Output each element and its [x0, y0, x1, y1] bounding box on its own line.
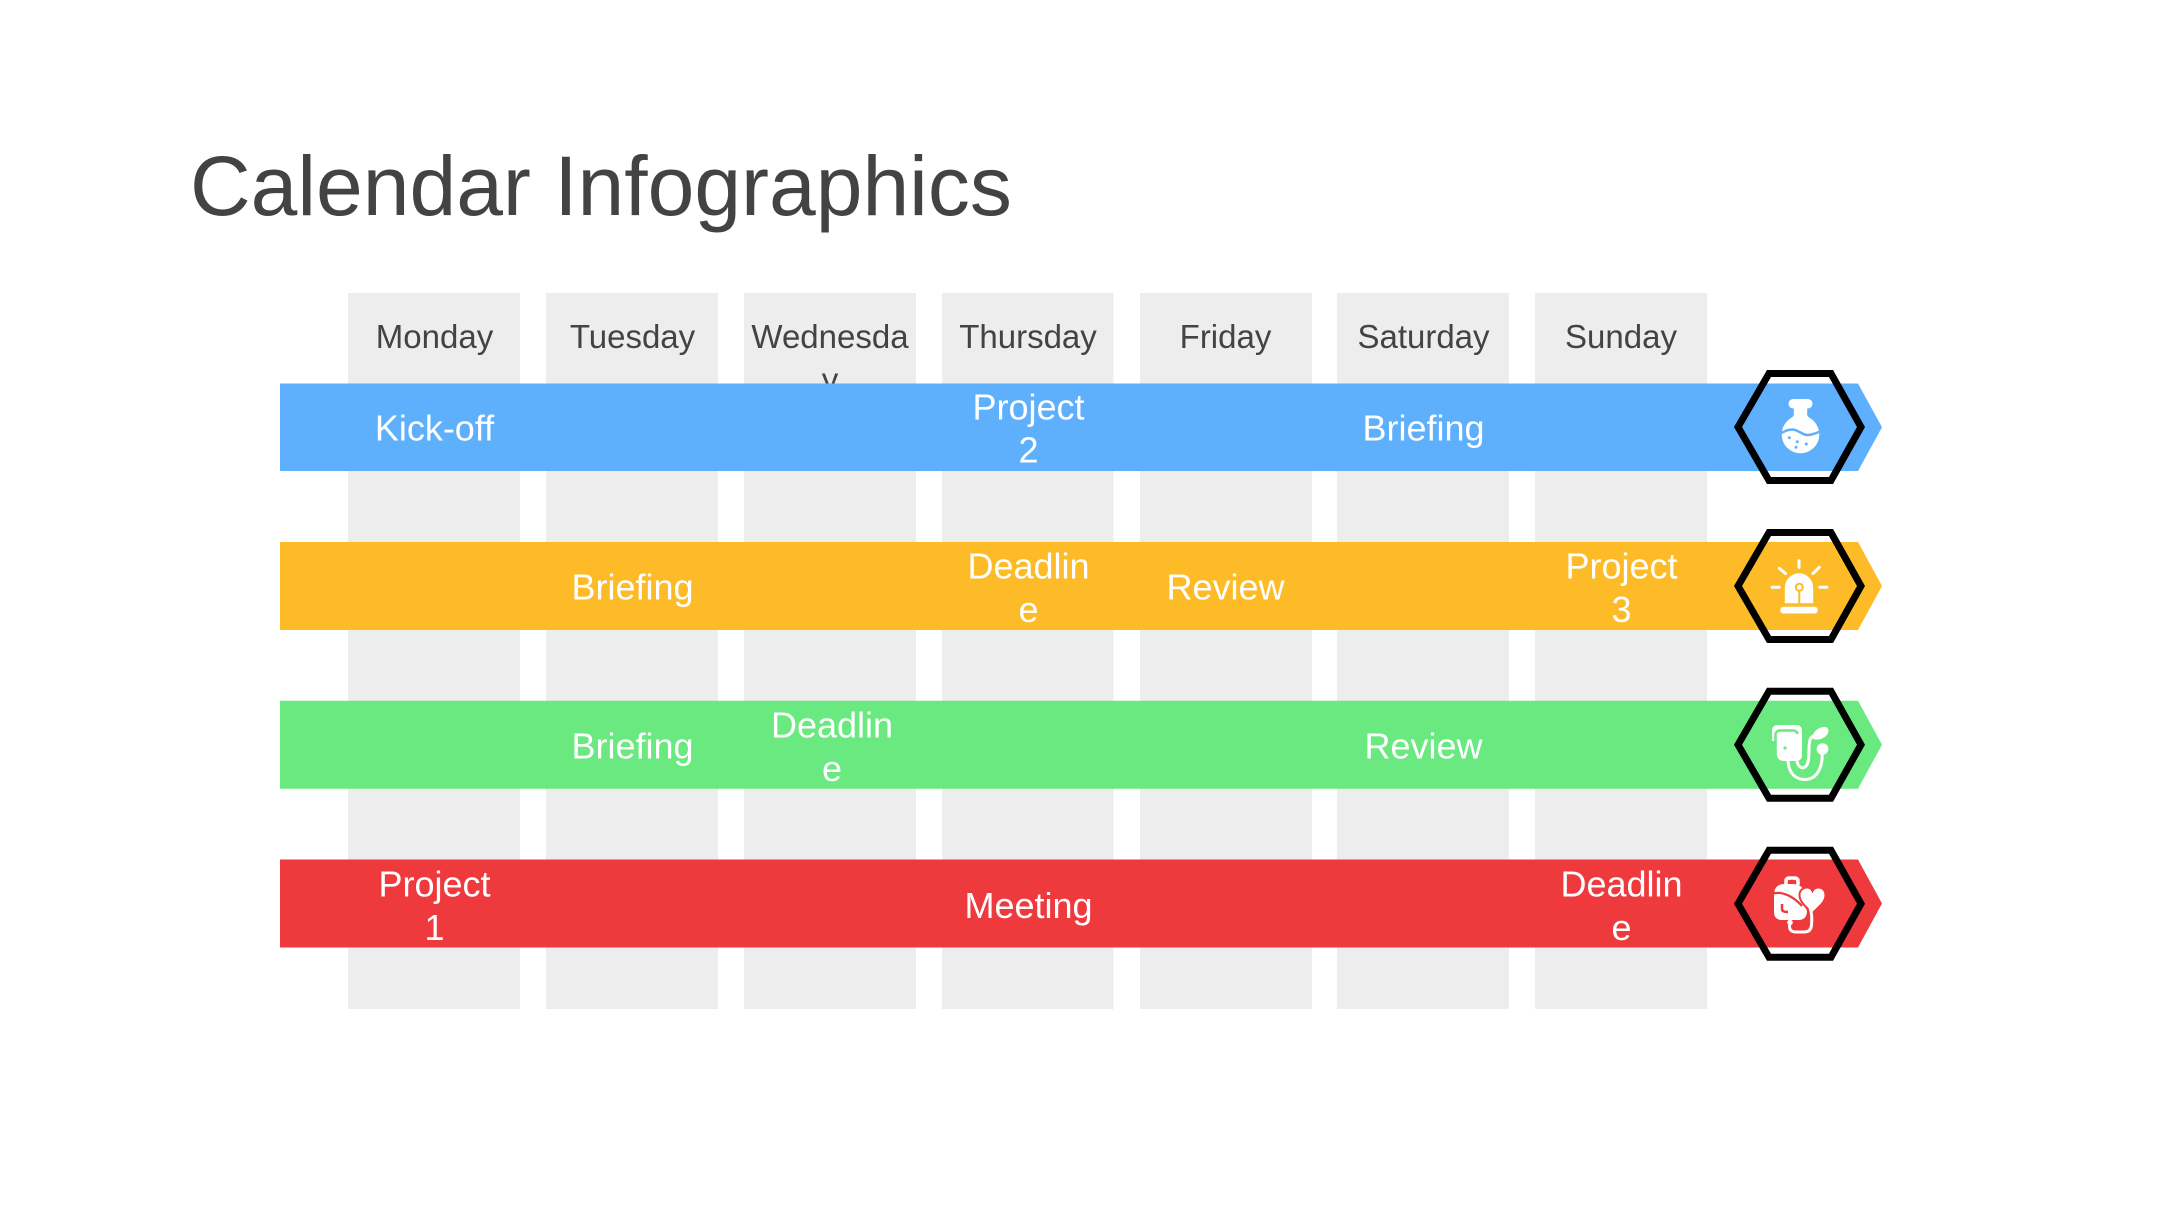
yellow row labels: 3: [1611, 589, 1632, 630]
yellow row labels: Deadlin: [967, 546, 1090, 586]
column: Sunday: [1535, 293, 1707, 1009]
yellow row labels: e: [1018, 589, 1039, 630]
yellow row labels: Review: [1166, 567, 1286, 608]
blue row labels: 2: [1018, 430, 1039, 471]
yellow arrow bar: [280, 542, 1882, 630]
column: Tuesday: Tuesday: [570, 318, 696, 355]
green row labels: Briefing: [571, 726, 694, 767]
green arrow bar: [280, 701, 1882, 789]
column: Thursday: Thursday: [959, 318, 1097, 355]
hexagon frame: [1738, 532, 1861, 640]
hexagon frame: [1738, 691, 1861, 798]
row: yellow: [280, 532, 1882, 640]
red row labels: [378, 864, 1683, 948]
column: Saturday: [1337, 293, 1509, 1009]
column: Wednesday: y: [822, 361, 839, 398]
row: blue: [280, 374, 1882, 480]
column: Monday: Monday: [376, 318, 494, 355]
blue row labels: Briefing: [1362, 408, 1485, 448]
row: green: [280, 691, 1882, 798]
column: Tuesday: [546, 293, 718, 1009]
blue row labels: Project: [972, 386, 1085, 428]
red arrow bar: [280, 860, 1882, 948]
red row labels: Meeting: [964, 885, 1093, 926]
green row labels: [571, 705, 1484, 789]
blue arrow bar: [280, 384, 1882, 471]
yellow row labels: Briefing: [571, 567, 694, 608]
column: Monday: [348, 293, 520, 1009]
hexagon frame: [1738, 850, 1861, 957]
column: Sunday: Sunday: [1565, 318, 1677, 355]
icon: flask: [1781, 399, 1820, 453]
icon: blood pressure monitor: [1772, 725, 1828, 780]
blue row labels: [375, 386, 1485, 471]
green row labels: e: [822, 748, 842, 789]
yellow row labels: Project: [1565, 546, 1678, 586]
hexagon frame: [1738, 374, 1861, 480]
icon: medical bag with heart: [1773, 878, 1826, 932]
row: red: [280, 850, 1882, 957]
blue row labels: Kick-off: [375, 408, 495, 448]
green row labels: Deadlin: [771, 705, 893, 746]
icon: siren: [1771, 559, 1828, 614]
day columns: [348, 293, 1707, 1009]
red row labels: e: [1611, 907, 1632, 948]
title: Calendar Infographics: [190, 139, 1012, 233]
column: Friday: [1140, 293, 1312, 1009]
column: Wednesday: Wednesda: [751, 318, 909, 355]
yellow row labels: [571, 546, 1678, 630]
column: Saturday: Saturday: [1357, 318, 1490, 355]
red row labels: Project: [378, 864, 491, 905]
red row labels: 1: [424, 907, 445, 948]
column: Friday: Friday: [1180, 318, 1272, 355]
column: Wednesday: [744, 293, 916, 1009]
green row labels: Review: [1364, 726, 1484, 767]
red row labels: Deadlin: [1560, 864, 1683, 905]
column: Thursday: [942, 293, 1114, 1009]
